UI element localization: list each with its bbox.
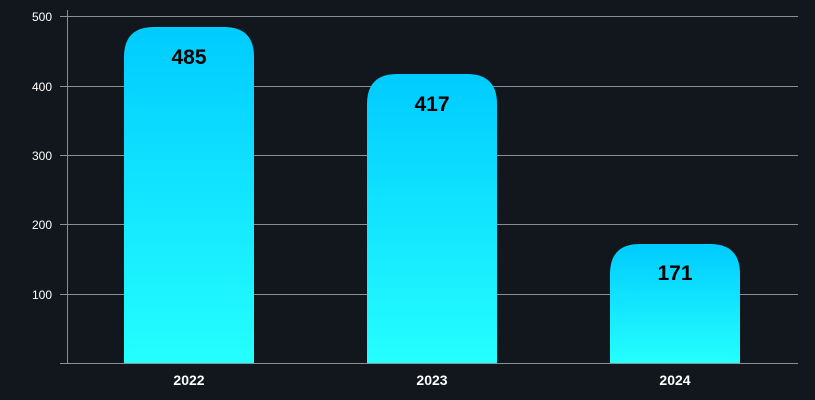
y axis labels: 500 [32, 10, 52, 24]
bar: 2023: 417 [414, 93, 450, 116]
bar: 2023 [367, 74, 497, 363]
y axis labels [32, 10, 52, 302]
bar: 2024 [610, 244, 740, 363]
x axis labels: 2023 [416, 372, 448, 388]
bar: 2022: 485 [171, 46, 207, 69]
bar: 2024: 171 [657, 262, 693, 285]
y axis labels: 300 [32, 149, 52, 163]
y axis labels: 100 [32, 288, 52, 302]
y axis labels: 200 [32, 218, 52, 232]
x axis labels: 2024 [659, 372, 691, 388]
x axis labels: 2022 [173, 372, 205, 388]
x axis labels [173, 372, 691, 388]
y axis labels: 400 [32, 80, 52, 94]
bar: 2022 [124, 27, 254, 363]
